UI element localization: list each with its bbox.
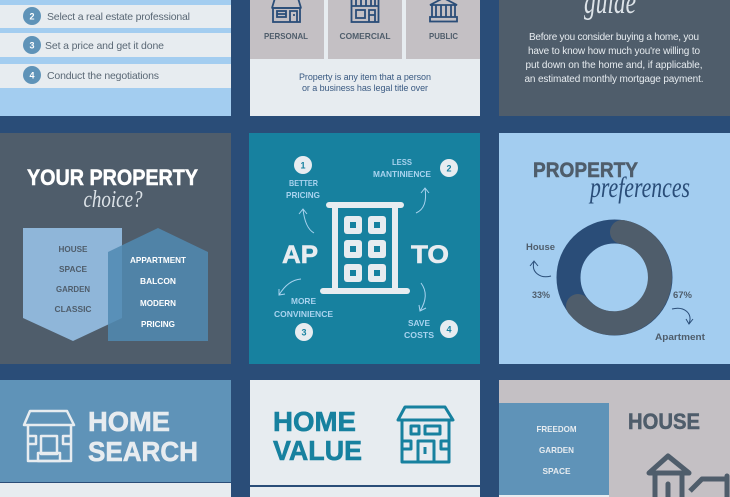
step 3: Set a price and get it done: [45, 40, 164, 52]
icon: personal house: [272, 0, 302, 22]
heading: HOME: [273, 406, 356, 437]
house feature list: [499, 403, 609, 495]
arrow 3: [279, 279, 301, 295]
heading: HOME: [88, 406, 170, 437]
benefit 3: [274, 296, 333, 341]
benefit 3: 3: [301, 328, 307, 338]
property definition: or a business has legal title over: [302, 83, 428, 93]
icon: public building: [430, 0, 457, 22]
panel: budget guide: [499, 0, 730, 116]
right pentagon list: PRICING: [141, 319, 175, 329]
benefit 3: CONVINIENCE: [274, 309, 333, 319]
right pentagon list: BALCON: [140, 276, 176, 286]
arrow 1: [299, 209, 314, 233]
card: personal: [250, 0, 324, 59]
budget text: Before you consider buying a home, you: [529, 32, 699, 43]
panel: apartment benefits: [249, 133, 480, 364]
budget text: an estimated monthly mortgage payment.: [524, 74, 704, 85]
budget text: put down on the home and, if applicable,: [526, 60, 702, 71]
benefit 4: SAVE: [408, 318, 430, 328]
right pentagon list: APPARTMENT: [130, 255, 187, 265]
word: AP: AP: [282, 241, 318, 269]
arrow 2: [416, 188, 429, 213]
label: house: 33%: [532, 290, 550, 300]
house feature list: FREEDOM: [536, 424, 576, 434]
benefit 4: COSTS: [404, 330, 434, 340]
label: apartment: 67%: [673, 290, 692, 300]
benefit 2: [373, 157, 458, 179]
label: house: House: [526, 242, 555, 252]
benefit 4: [404, 318, 458, 340]
arrow 4: [419, 283, 426, 311]
step 3: [0, 33, 231, 57]
card: public: [406, 0, 480, 59]
card: public: PUBLIC: [429, 31, 458, 41]
label: apartment: [655, 290, 705, 342]
property definition: [299, 72, 431, 93]
donut chart: [568, 232, 660, 324]
icon: house with path: [649, 456, 728, 497]
icon: commercial building: [352, 0, 378, 22]
panel: your property choice: [0, 133, 231, 364]
heading: YOUR PROPERTY: [27, 165, 198, 190]
benefit 1: 1: [300, 160, 306, 170]
icon: apartment building: [320, 202, 410, 294]
panel: house: [499, 380, 730, 497]
panel: home value: [250, 380, 480, 497]
icon: two storey house: [398, 407, 453, 462]
card: personal: PERSONAL: [264, 31, 308, 41]
house feature list: GARDEN: [539, 445, 574, 455]
benefit 2: LESS: [392, 157, 412, 167]
heading: [88, 406, 198, 467]
step 4: 4: [29, 70, 35, 80]
word: TO: TO: [411, 241, 449, 269]
card: comercial: [328, 0, 402, 59]
heading: VALUE: [273, 435, 362, 466]
panel: home search: [0, 380, 231, 497]
left pentagon list: SPACE: [59, 264, 87, 274]
house feature list: SPACE: [542, 466, 571, 476]
step 2: Select a real estate professional: [47, 11, 190, 23]
benefit 4: 4: [446, 324, 452, 334]
heading: [273, 406, 362, 466]
step 2: [0, 5, 231, 28]
right pentagon list: MODERN: [140, 298, 176, 308]
property definition: Property is any item that a person: [299, 72, 431, 82]
left pentagon list: CLASSIC: [54, 304, 92, 314]
label: house: [526, 242, 555, 300]
script subheading: preferences: [589, 171, 690, 204]
benefit 1: BETTER: [289, 178, 318, 188]
icon: house outline: [24, 411, 74, 461]
budget text: have to know how much you're willing to: [528, 46, 700, 57]
panel: property types: [250, 0, 480, 116]
step 4: [0, 64, 231, 88]
benefit 2: 2: [446, 164, 452, 174]
heading: PROPERTY: [533, 159, 638, 182]
budget text: [524, 32, 704, 85]
card: comercial: COMERCIAL: [340, 31, 390, 41]
benefit 2: MANTINIENCE: [373, 169, 431, 179]
script subheading: choice?: [84, 187, 142, 213]
right pentagon list: [108, 228, 208, 341]
heading: HOUSE: [628, 409, 700, 434]
heading: SEARCH: [88, 436, 198, 467]
step 4: Conduct the negotiations: [47, 70, 159, 82]
step 2: 2: [29, 12, 35, 22]
left pentagon list: [23, 228, 122, 341]
panel: steps list: [0, 0, 231, 116]
benefit 1: [286, 156, 320, 200]
benefit 3: MORE: [291, 296, 316, 306]
left pentagon list: HOUSE: [58, 244, 88, 254]
step 3: 3: [29, 40, 35, 50]
benefit 1: PRICING: [286, 190, 320, 200]
label: apartment: Apartment: [655, 332, 705, 342]
panel: property preferences: [499, 133, 730, 364]
left pentagon list: GARDEN: [56, 284, 90, 294]
